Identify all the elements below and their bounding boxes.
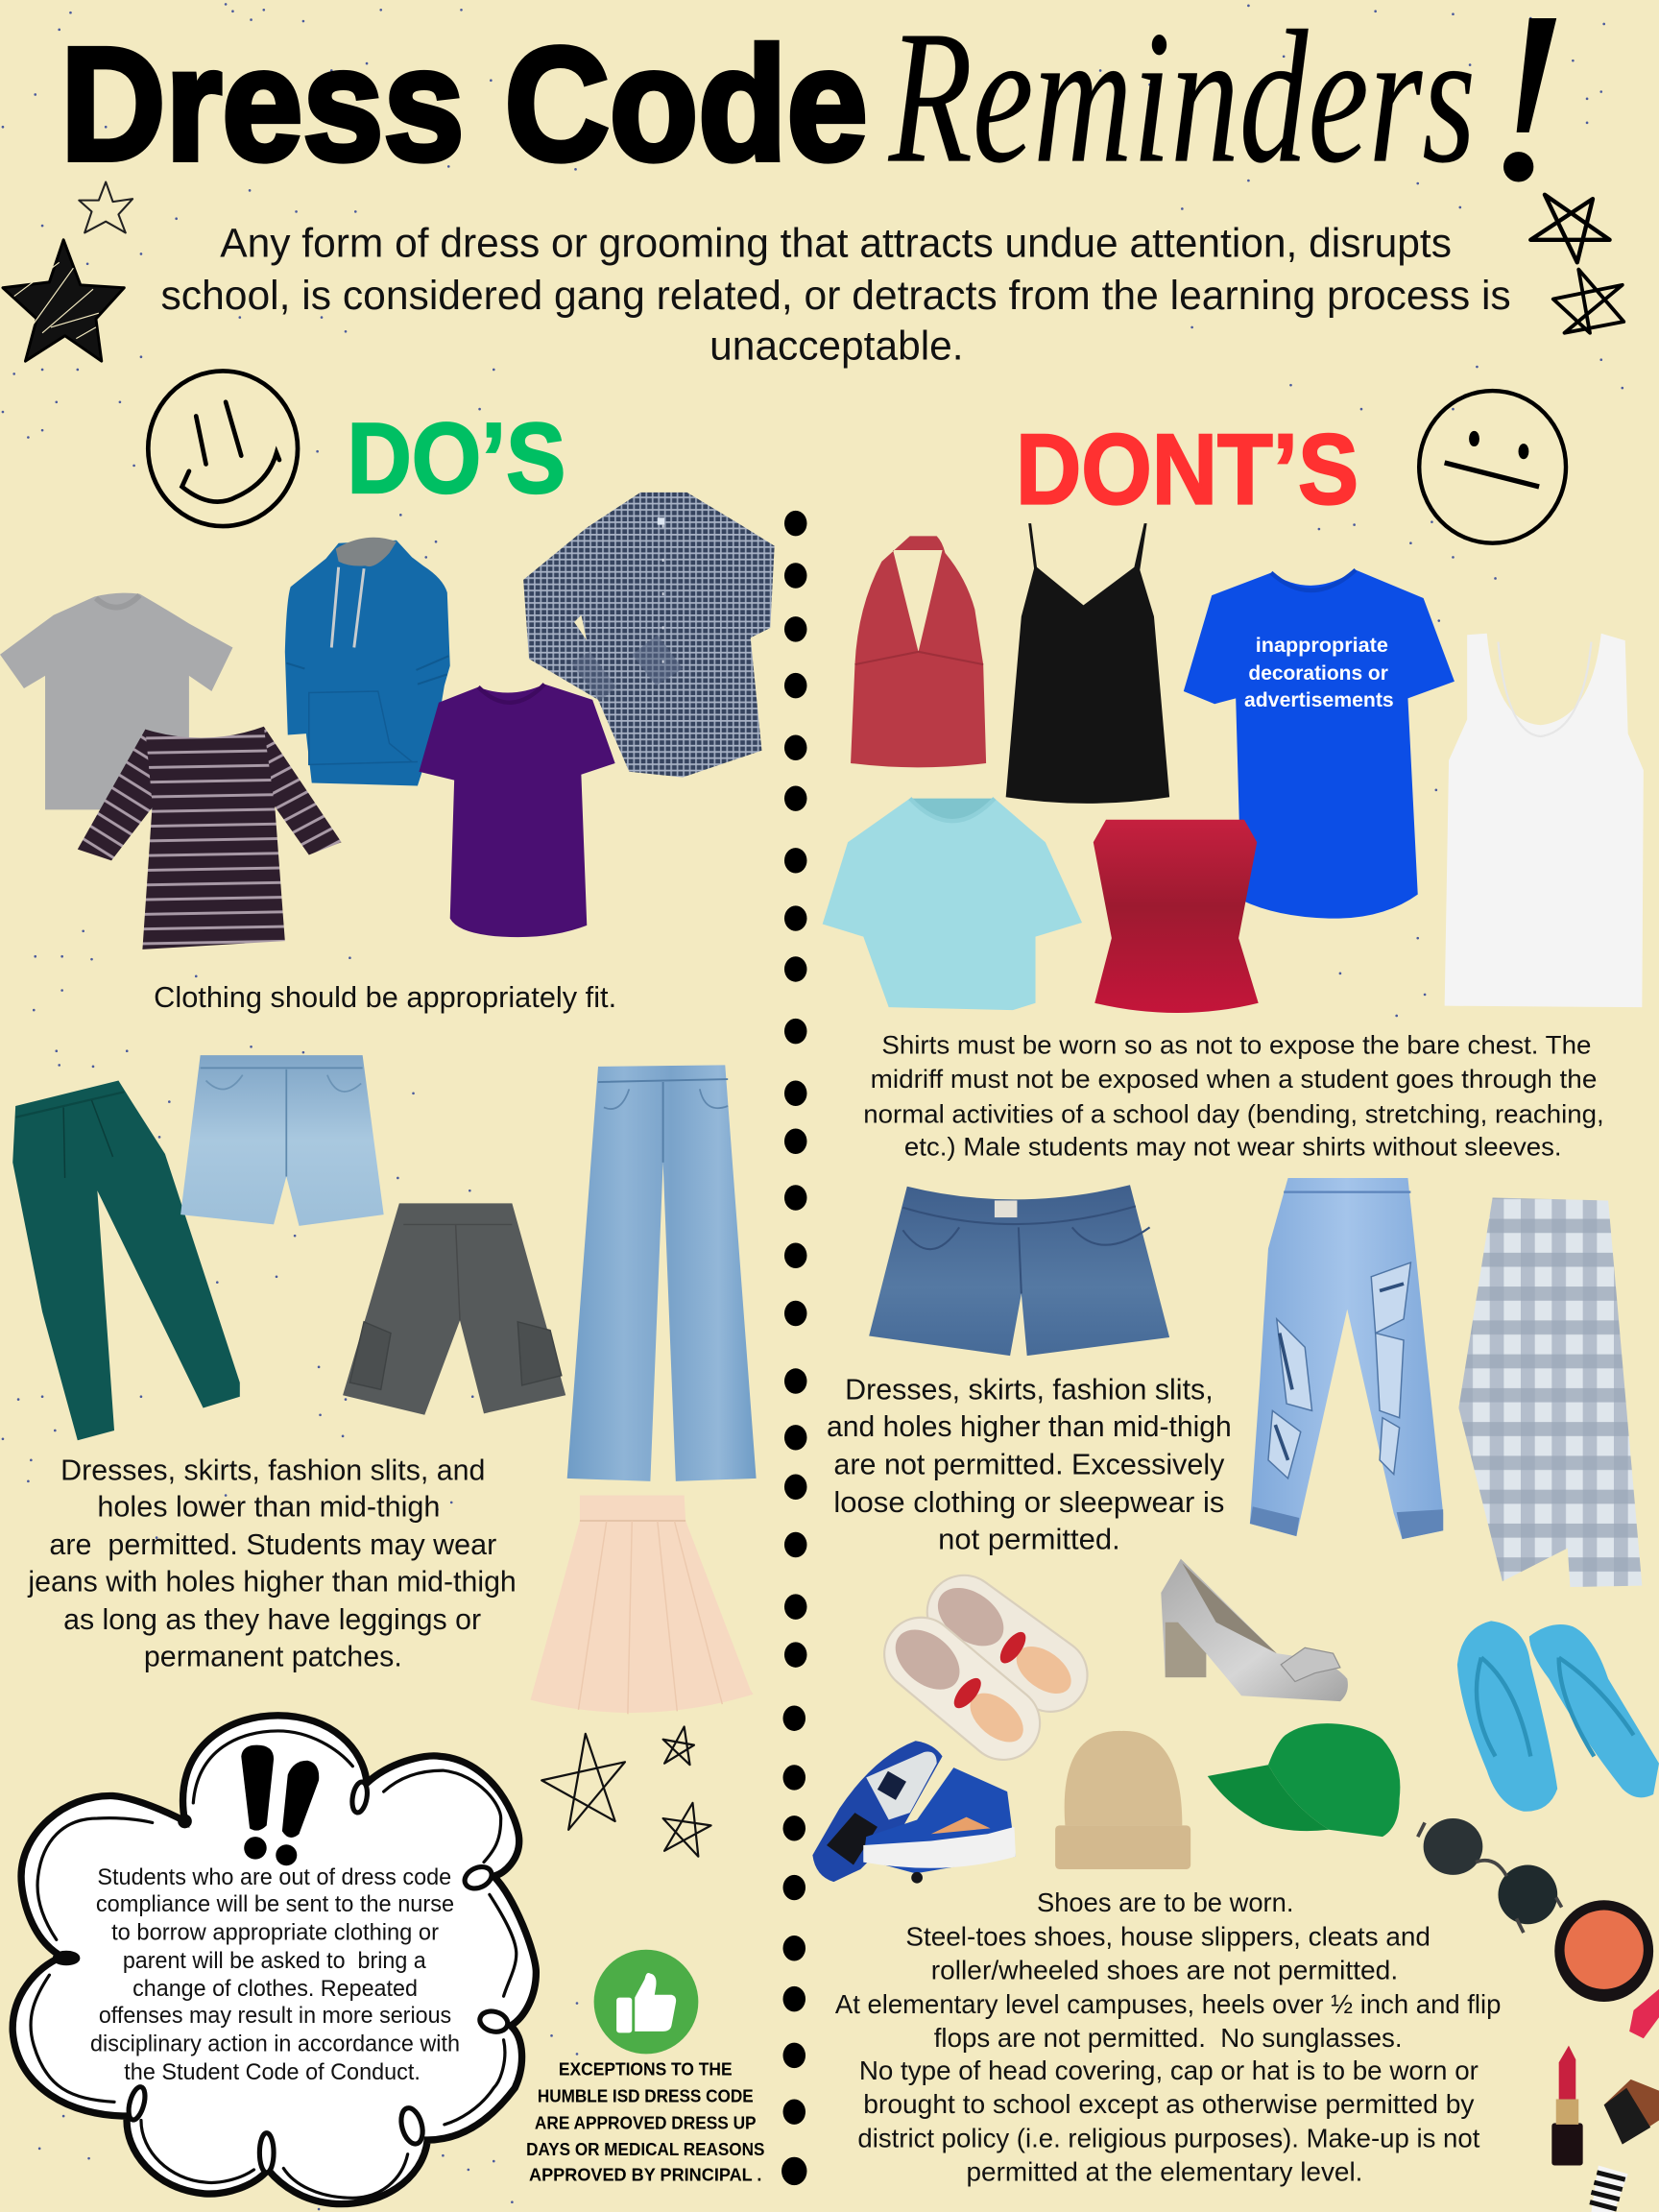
denim short shorts <box>869 1185 1169 1356</box>
icon: smiley face <box>148 371 298 526</box>
intro paragraph: Any form of dress or grooming that attracts undue attention, disrupts <box>220 220 1452 266</box>
text: shirt slogan: advertisements <box>1244 688 1394 711</box>
text: do's dresses and skirts: are permitted. Students may wear <box>49 1527 496 1561</box>
text: don'ts shirts: Shirts must be worn so as not to expose the bare chest. The <box>881 1031 1591 1060</box>
icon: thumbs up <box>594 1950 698 2054</box>
text: don'ts dresses: loose clothing or sleepwear is <box>833 1485 1224 1519</box>
icon: right lower star <box>1553 270 1623 333</box>
heading: DO'S: DO’S <box>347 403 565 515</box>
black camisole <box>1006 523 1169 804</box>
striped makeup tube <box>1590 2166 1628 2212</box>
green joggers <box>12 1081 240 1440</box>
cloud outline <box>12 1716 536 2204</box>
icon: medium sketched star <box>663 1803 711 1857</box>
intro paragraph: unacceptable. <box>709 324 964 370</box>
text: shoes and head coverings <box>835 1887 1501 2187</box>
icon: small sketched star <box>663 1727 694 1765</box>
plaid pajama pants <box>1458 1198 1642 1587</box>
text: do's dresses and skirts: Dresses, skirts, fashion slits, and <box>60 1453 485 1486</box>
text: shoes and head coverings: district policy (i.e. religious purposes). Make-up is not <box>857 2123 1480 2152</box>
text: callout message: to borrow appropriate clothing or <box>111 1919 439 1945</box>
text: shirt slogan: inappropriate <box>1256 634 1388 657</box>
silver heel <box>1161 1559 1348 1701</box>
text: don'ts dresses <box>827 1373 1232 1555</box>
green cap <box>1208 1723 1400 1837</box>
blue t-shirt <box>1184 570 1455 919</box>
red tube top <box>1094 820 1259 1013</box>
text: exceptions note: ARE APPROVED DRESS UP <box>535 2112 757 2132</box>
icon: small outline star <box>79 182 132 232</box>
text: exceptions note: EXCEPTIONS TO THE <box>559 2058 733 2079</box>
text: exceptions note <box>526 2058 764 2185</box>
heading: DONT'S: DONT’S <box>1016 415 1358 526</box>
text: don'ts dresses: not permitted. <box>938 1522 1120 1555</box>
red lipstick <box>1551 2046 1583 2166</box>
purple t-shirt <box>419 685 615 937</box>
text: exceptions note: DAYS OR MEDICAL REASONS <box>526 2139 764 2159</box>
icon: right top star <box>1530 195 1610 262</box>
grey t-shirt <box>0 593 232 809</box>
panel: cloud callout <box>12 1716 536 2204</box>
text: exceptions note: APPROVED BY PRINCIPAL . <box>529 2165 761 2185</box>
text: don'ts shirts: etc.) Male students may not wear shirts without sleeves. <box>904 1132 1562 1161</box>
peach pleated skirt <box>530 1496 754 1714</box>
text: do's dresses and skirts: jeans with holes higher than mid-thigh <box>27 1564 517 1598</box>
blue flip flops <box>1457 1621 1659 1812</box>
icon: scribbled black star <box>3 240 124 361</box>
text: don'ts dresses: are not permitted. Excessively <box>833 1448 1225 1481</box>
light blue crop tee <box>823 799 1082 1010</box>
text: callout message: offenses may result in more serious <box>99 2003 451 2029</box>
text: don'ts shirts: normal activities of a school day (bending, stretching, reaching, <box>863 1100 1604 1129</box>
text: callout message: change of clothes. Repeated <box>132 1976 418 2002</box>
text: don'ts dresses: Dresses, skirts, fashion slits, <box>845 1373 1214 1407</box>
light denim shorts <box>180 1055 384 1226</box>
panel: don'ts bottoms <box>869 1178 1642 1587</box>
intro paragraph: school, is considered gang related, or detracts from the learning process is <box>161 273 1511 319</box>
sunglasses <box>1418 1818 1562 1933</box>
text: clothing fit: Clothing should be appropriately fit. <box>154 980 616 1014</box>
house slippers <box>870 1561 1102 1775</box>
icon: large sketched star <box>541 1734 625 1830</box>
panel: do's tops <box>0 493 775 950</box>
checked button-down shirt <box>523 493 775 778</box>
text: do's dresses and skirts: holes lower than mid-thigh <box>97 1490 440 1524</box>
panel: do's bottoms <box>12 1055 757 1714</box>
dotted divider <box>781 511 806 2185</box>
text: don'ts shirts <box>863 1031 1604 1161</box>
text: do's dresses and skirts: permanent patches. <box>144 1639 402 1672</box>
text: shoes and head coverings: No type of head covering, cap or hat is to be worn or <box>859 2056 1479 2085</box>
text: shoes and head coverings: permitted at the elementary level. <box>967 2157 1362 2187</box>
panel: don'ts tops <box>823 523 1644 1013</box>
text: shirt slogan <box>1244 634 1394 711</box>
text: callout message: compliance will be sent to the nurse <box>96 1891 454 1917</box>
text: shoes and head coverings: brought to school except as otherwise permitted by <box>863 2089 1475 2119</box>
makeup brush <box>1604 2080 1659 2144</box>
text: shoes and head coverings: flops are not permitted. No sunglasses. <box>934 2023 1403 2053</box>
red halter top <box>851 536 986 767</box>
text: shoes and head coverings: Steel-toes shoes, house slippers, cleats and <box>905 1921 1431 1951</box>
intro paragraph <box>161 220 1511 370</box>
icon: neutral face <box>1419 391 1566 543</box>
text: callout message: parent will be asked to bring a <box>123 1948 426 1974</box>
text: callout message: disciplinary action in accordance with <box>90 2031 460 2056</box>
text: don'ts dresses: and holes higher than mid-thigh <box>827 1409 1232 1443</box>
pink lipstick <box>1629 1989 1659 2038</box>
roller shoes <box>812 1741 1016 1884</box>
text: exceptions note: HUMBLE ISD DRESS CODE <box>538 2085 754 2105</box>
icon: double exclamation <box>241 1745 319 1865</box>
text: shoes and head coverings: roller/wheeled shoes are not permitted. <box>931 1956 1398 1985</box>
text: callout message: the Student Code of Conduct. <box>124 2059 421 2085</box>
text: don'ts shirts: midriff must not be exposed when a student goes through the <box>871 1065 1597 1094</box>
white tank top <box>1445 634 1644 1007</box>
text: shirt slogan: decorations or <box>1248 661 1388 685</box>
title: Dress Code: Dress Code <box>60 14 868 194</box>
text: callout message: Students who are out of dress code <box>97 1864 451 1890</box>
panel: don'ts shoes and accessories <box>812 1559 1659 2212</box>
wide leg jeans <box>567 1065 757 1481</box>
beige beanie <box>1055 1731 1190 1869</box>
text: do's dresses and skirts: as long as they have leggings or <box>63 1602 481 1636</box>
title <box>60 0 1566 230</box>
blue hoodie <box>285 538 450 785</box>
text: shoes and head coverings: At elementary level campuses, heels over ½ inch and flip <box>835 1989 1501 2019</box>
grey cargo shorts <box>343 1203 565 1415</box>
text: shoes and head coverings: Shoes are to be worn. <box>1037 1887 1293 1917</box>
text: callout message <box>90 1864 460 2085</box>
text: do's dresses and skirts <box>27 1453 517 1672</box>
ripped jeans <box>1250 1178 1443 1539</box>
striped long-sleeve top <box>78 727 342 950</box>
orange blush compact <box>1554 1900 1653 2002</box>
